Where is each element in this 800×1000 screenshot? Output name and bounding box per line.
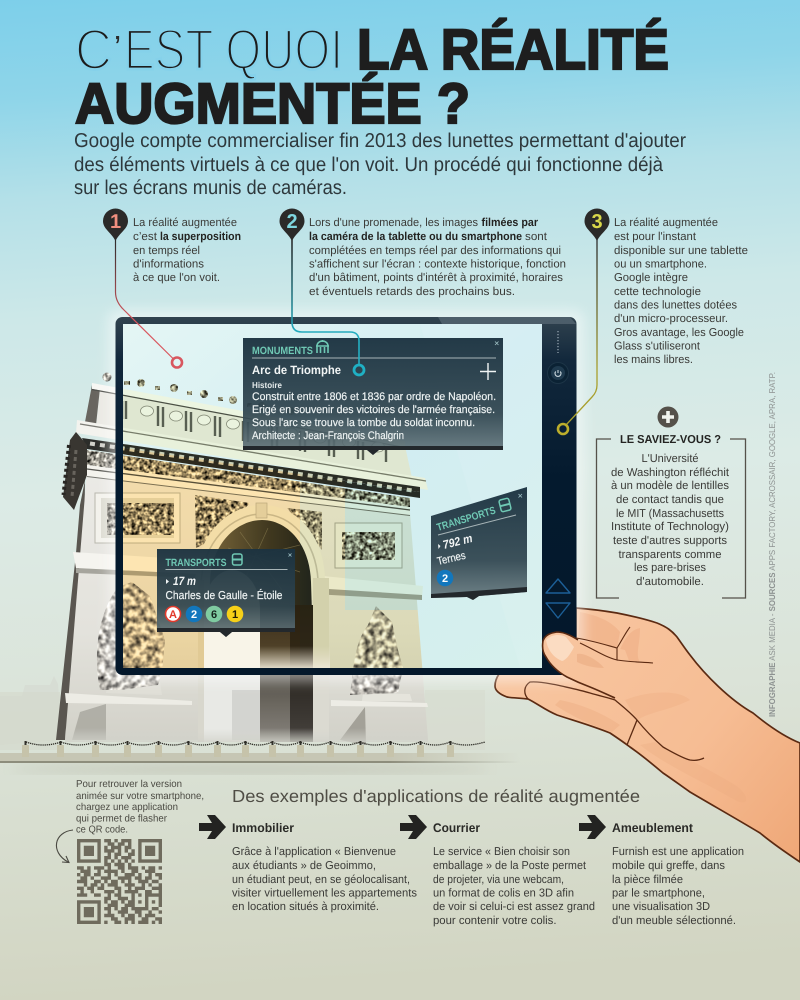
- metro lines: 6: [211, 609, 217, 621]
- title: bold part, line one: LA RÉALITÉ: [357, 18, 669, 82]
- bracket frame: [596, 439, 746, 598]
- text block 1: la superposition: [160, 231, 241, 243]
- pin 1: 1: [110, 211, 121, 233]
- connector line 2 with ring: [292, 238, 364, 375]
- thumb: [543, 627, 653, 698]
- callout text: de contact tandis que: [616, 494, 724, 506]
- bezel reflection: [438, 317, 576, 324]
- text block 3: ou un smartphone.: [614, 258, 707, 270]
- title: [75, 18, 669, 136]
- heading: transports: TRANSPORTS: [166, 557, 226, 569]
- arrow: [199, 815, 226, 839]
- text: la pièce filmée: [612, 874, 683, 886]
- icon: close: [495, 342, 498, 345]
- text: pour contenir votre colis.: [433, 915, 556, 927]
- text block 3: cette technologie: [614, 286, 701, 298]
- intro text: Google compte commercialiser fin 2013 des lunettes permettant d'ajouter: [74, 130, 686, 152]
- text block 3: dans des lunettes dotées: [614, 300, 737, 312]
- text: un étudiant peut, en se géolocalisant,: [232, 874, 410, 886]
- subheading: Courrier: [433, 821, 480, 835]
- callout text: Institute of Technology): [611, 521, 729, 533]
- text block 2: d'un bâtiment, points d'intérêt à proximité, horaires: [309, 272, 563, 284]
- text block 2: et éventuels retards des prochains bus.: [309, 286, 515, 298]
- credits: INFOGRAPHIE ASK MEDIA - SOURCES APPS FACTORY, ACROSSAIR, GOOGLE, APRA, RATP.: [767, 372, 777, 717]
- text: une visualisation 3D: [612, 901, 710, 913]
- callout text: de Washington réfléchit: [611, 467, 730, 479]
- callout text: le MIT (Massachusetts: [616, 508, 724, 520]
- pin 3: 3: [591, 211, 603, 233]
- qr instructions: animée sur votre smartphone,: [76, 791, 204, 802]
- text block 2: sont: [525, 231, 548, 243]
- callout text: teste d'autres supports: [613, 535, 727, 547]
- metro line: 2: [442, 573, 448, 585]
- station name: Charles de Gaulle - Étoile: [166, 589, 282, 602]
- panel: transports, charles de gaulle: [157, 549, 295, 637]
- section heading: Des exemples d'applications de réalité augmentée: [232, 786, 640, 806]
- text block 2: [309, 217, 566, 298]
- text block 2: la caméra de la tablette ou du smartphone: [309, 231, 522, 243]
- panel text: Erigé en souvenir des victoires de l'armée française.: [252, 404, 495, 416]
- text: Grâce à l'application « Bienvenue: [232, 846, 396, 858]
- qr code: [77, 841, 162, 922]
- pin 2: 2: [286, 211, 298, 233]
- distance: 17 m: [173, 574, 196, 588]
- text: Furnish est une application: [612, 846, 744, 858]
- callout text: d'automobile.: [636, 576, 704, 588]
- icon: bus: [499, 498, 511, 512]
- panel: monuments: [243, 338, 503, 455]
- arrow to qr code: [56, 830, 73, 862]
- text block 2: Lors d'une promenade, les images: [309, 217, 478, 229]
- text block 2: filmées par: [482, 217, 538, 229]
- tablet glow: [108, 310, 584, 682]
- panel text: Architecte : Jean-François Chalgrin: [252, 430, 404, 442]
- panel text: [252, 380, 496, 442]
- icon: monument: [316, 340, 329, 353]
- text block 1: en temps réel: [133, 245, 200, 257]
- text: de voir si celui-ci est assez grand: [433, 901, 595, 913]
- callout: le saviez-vous: [596, 406, 746, 598]
- text block 3: [614, 217, 748, 366]
- callout text: L'Université: [642, 453, 698, 465]
- power button: [548, 362, 568, 384]
- text block 2: s'affichent sur l'écran : contexte historique, fonction: [309, 258, 566, 270]
- speaker dots: [557, 331, 559, 353]
- application: courrier: [400, 815, 595, 927]
- subheading: Ameublement: [612, 821, 694, 835]
- title: light part: C: [75, 18, 112, 82]
- intro text: sur les écrans munis de caméras.: [74, 177, 347, 199]
- callout text: transparents comme: [618, 549, 722, 561]
- text block 3: disponible sur une tablette: [614, 245, 748, 257]
- panel text: Sous l'arc se trouve la tombe du soldat inconnu.: [252, 417, 475, 429]
- monument name: Arc de Triomphe: [252, 363, 341, 377]
- text: Le service « Bien choisir son: [433, 846, 570, 858]
- title: bold part, line two: AUGMENTÉE ?: [75, 72, 470, 136]
- callout text: à un modèle de lentilles: [611, 480, 729, 492]
- title: light part: EST QUOI: [124, 18, 343, 82]
- text block 1: [133, 217, 241, 284]
- text block 3: La réalité augmentée: [614, 217, 718, 229]
- intro text: [74, 130, 686, 199]
- tablet: [100, 308, 592, 690]
- text: un format de colis en 3D afin: [433, 888, 574, 900]
- arrow: [579, 815, 606, 839]
- text: [433, 846, 595, 927]
- text block 1: La réalité augmentée: [133, 217, 237, 229]
- pin 1: [103, 208, 128, 241]
- qr instructions: qui permet de flasher: [76, 814, 168, 824]
- arrow: [400, 815, 427, 839]
- metro lines: 2: [191, 609, 197, 621]
- arc de triomphe outside the screen: [56, 372, 428, 745]
- pin 3: [584, 208, 610, 241]
- title: light part: ’: [114, 29, 121, 65]
- callout text: les pare-brises: [634, 562, 706, 574]
- text: de projeter, via une webcam,: [433, 874, 564, 886]
- chain and bollards: [22, 741, 485, 757]
- icon: bus: [232, 554, 242, 565]
- text: en location situés à proximité.: [232, 901, 379, 913]
- text block 3: d'un micro-processeur.: [614, 313, 728, 325]
- distance: 792 m: [441, 531, 474, 552]
- panel text: Histoire: [252, 380, 282, 390]
- callout text: [611, 453, 730, 588]
- text: [232, 846, 417, 913]
- station name: Ternes: [436, 550, 467, 568]
- icon: close: [518, 494, 522, 498]
- text: d'un meuble sélectionné.: [612, 915, 736, 927]
- panel text: Construit entre 1806 et 1836 par ordre de Napoléon.: [252, 391, 496, 403]
- text block 3: est pour l'instant: [614, 231, 697, 243]
- title: light part: [75, 18, 343, 82]
- icon: plus: [480, 363, 496, 380]
- text: [612, 846, 744, 927]
- lower fingers outline: [525, 682, 704, 760]
- text block 2: complétées en temps réel par des informations qui: [309, 245, 561, 257]
- knuckle lines: [576, 627, 653, 663]
- pin 2: [280, 208, 304, 241]
- text: aux étudiants » de Geoimmo,: [232, 860, 376, 872]
- text: visiter virtuellement les appartements: [232, 888, 417, 900]
- icon: close: [288, 554, 292, 556]
- text block 1: c’est: [133, 231, 158, 243]
- qr instructions: Pour retrouver la version: [76, 779, 182, 790]
- text: emballage » de la Poste permet: [433, 860, 587, 872]
- panel: transports, ternes: [431, 487, 527, 600]
- text block 1: d'informations: [133, 258, 204, 270]
- screen with arch seen through: [123, 324, 542, 668]
- text: par le smartphone,: [612, 888, 705, 900]
- heading: monuments: MONUMENTS: [252, 345, 313, 357]
- connector line 1 with ring: [116, 238, 182, 368]
- subheading: Immobilier: [232, 821, 294, 835]
- text: mobile qui greffe, dans: [612, 860, 725, 872]
- hand: [495, 608, 800, 862]
- metro lines: [166, 606, 243, 622]
- tablet body: [116, 317, 576, 675]
- connector line 3 with ring: [558, 238, 597, 434]
- application: immobilier: [199, 815, 417, 913]
- navigation arrows: [546, 579, 570, 618]
- background skyline and ground: [0, 676, 520, 774]
- thumb nail: [546, 635, 574, 661]
- text block 3: Gros avantage, les Google: [614, 327, 744, 339]
- metro lines: A: [169, 609, 177, 621]
- application: ameublement: [579, 815, 744, 927]
- qr instructions: ce QR code.: [76, 824, 128, 836]
- intro text: des éléments virtuels à ce que l'on voit. Un procédé qui fonctionne déjà: [74, 154, 664, 176]
- icon: plus: [658, 406, 678, 428]
- qr instructions: chargez une application: [76, 802, 178, 813]
- text block 3: Google intègre: [614, 272, 688, 284]
- text block 1: à ce que l'on voit.: [133, 272, 220, 284]
- text block 3: les mains libres.: [614, 354, 693, 366]
- heading: transports: TRANSPORTS: [435, 505, 497, 534]
- text block 3: Glass s'utiliseront: [614, 340, 701, 352]
- metro lines: 1: [232, 609, 238, 621]
- qr instructions: [76, 779, 204, 836]
- callout heading: LE SAVIEZ-VOUS ?: [620, 434, 721, 446]
